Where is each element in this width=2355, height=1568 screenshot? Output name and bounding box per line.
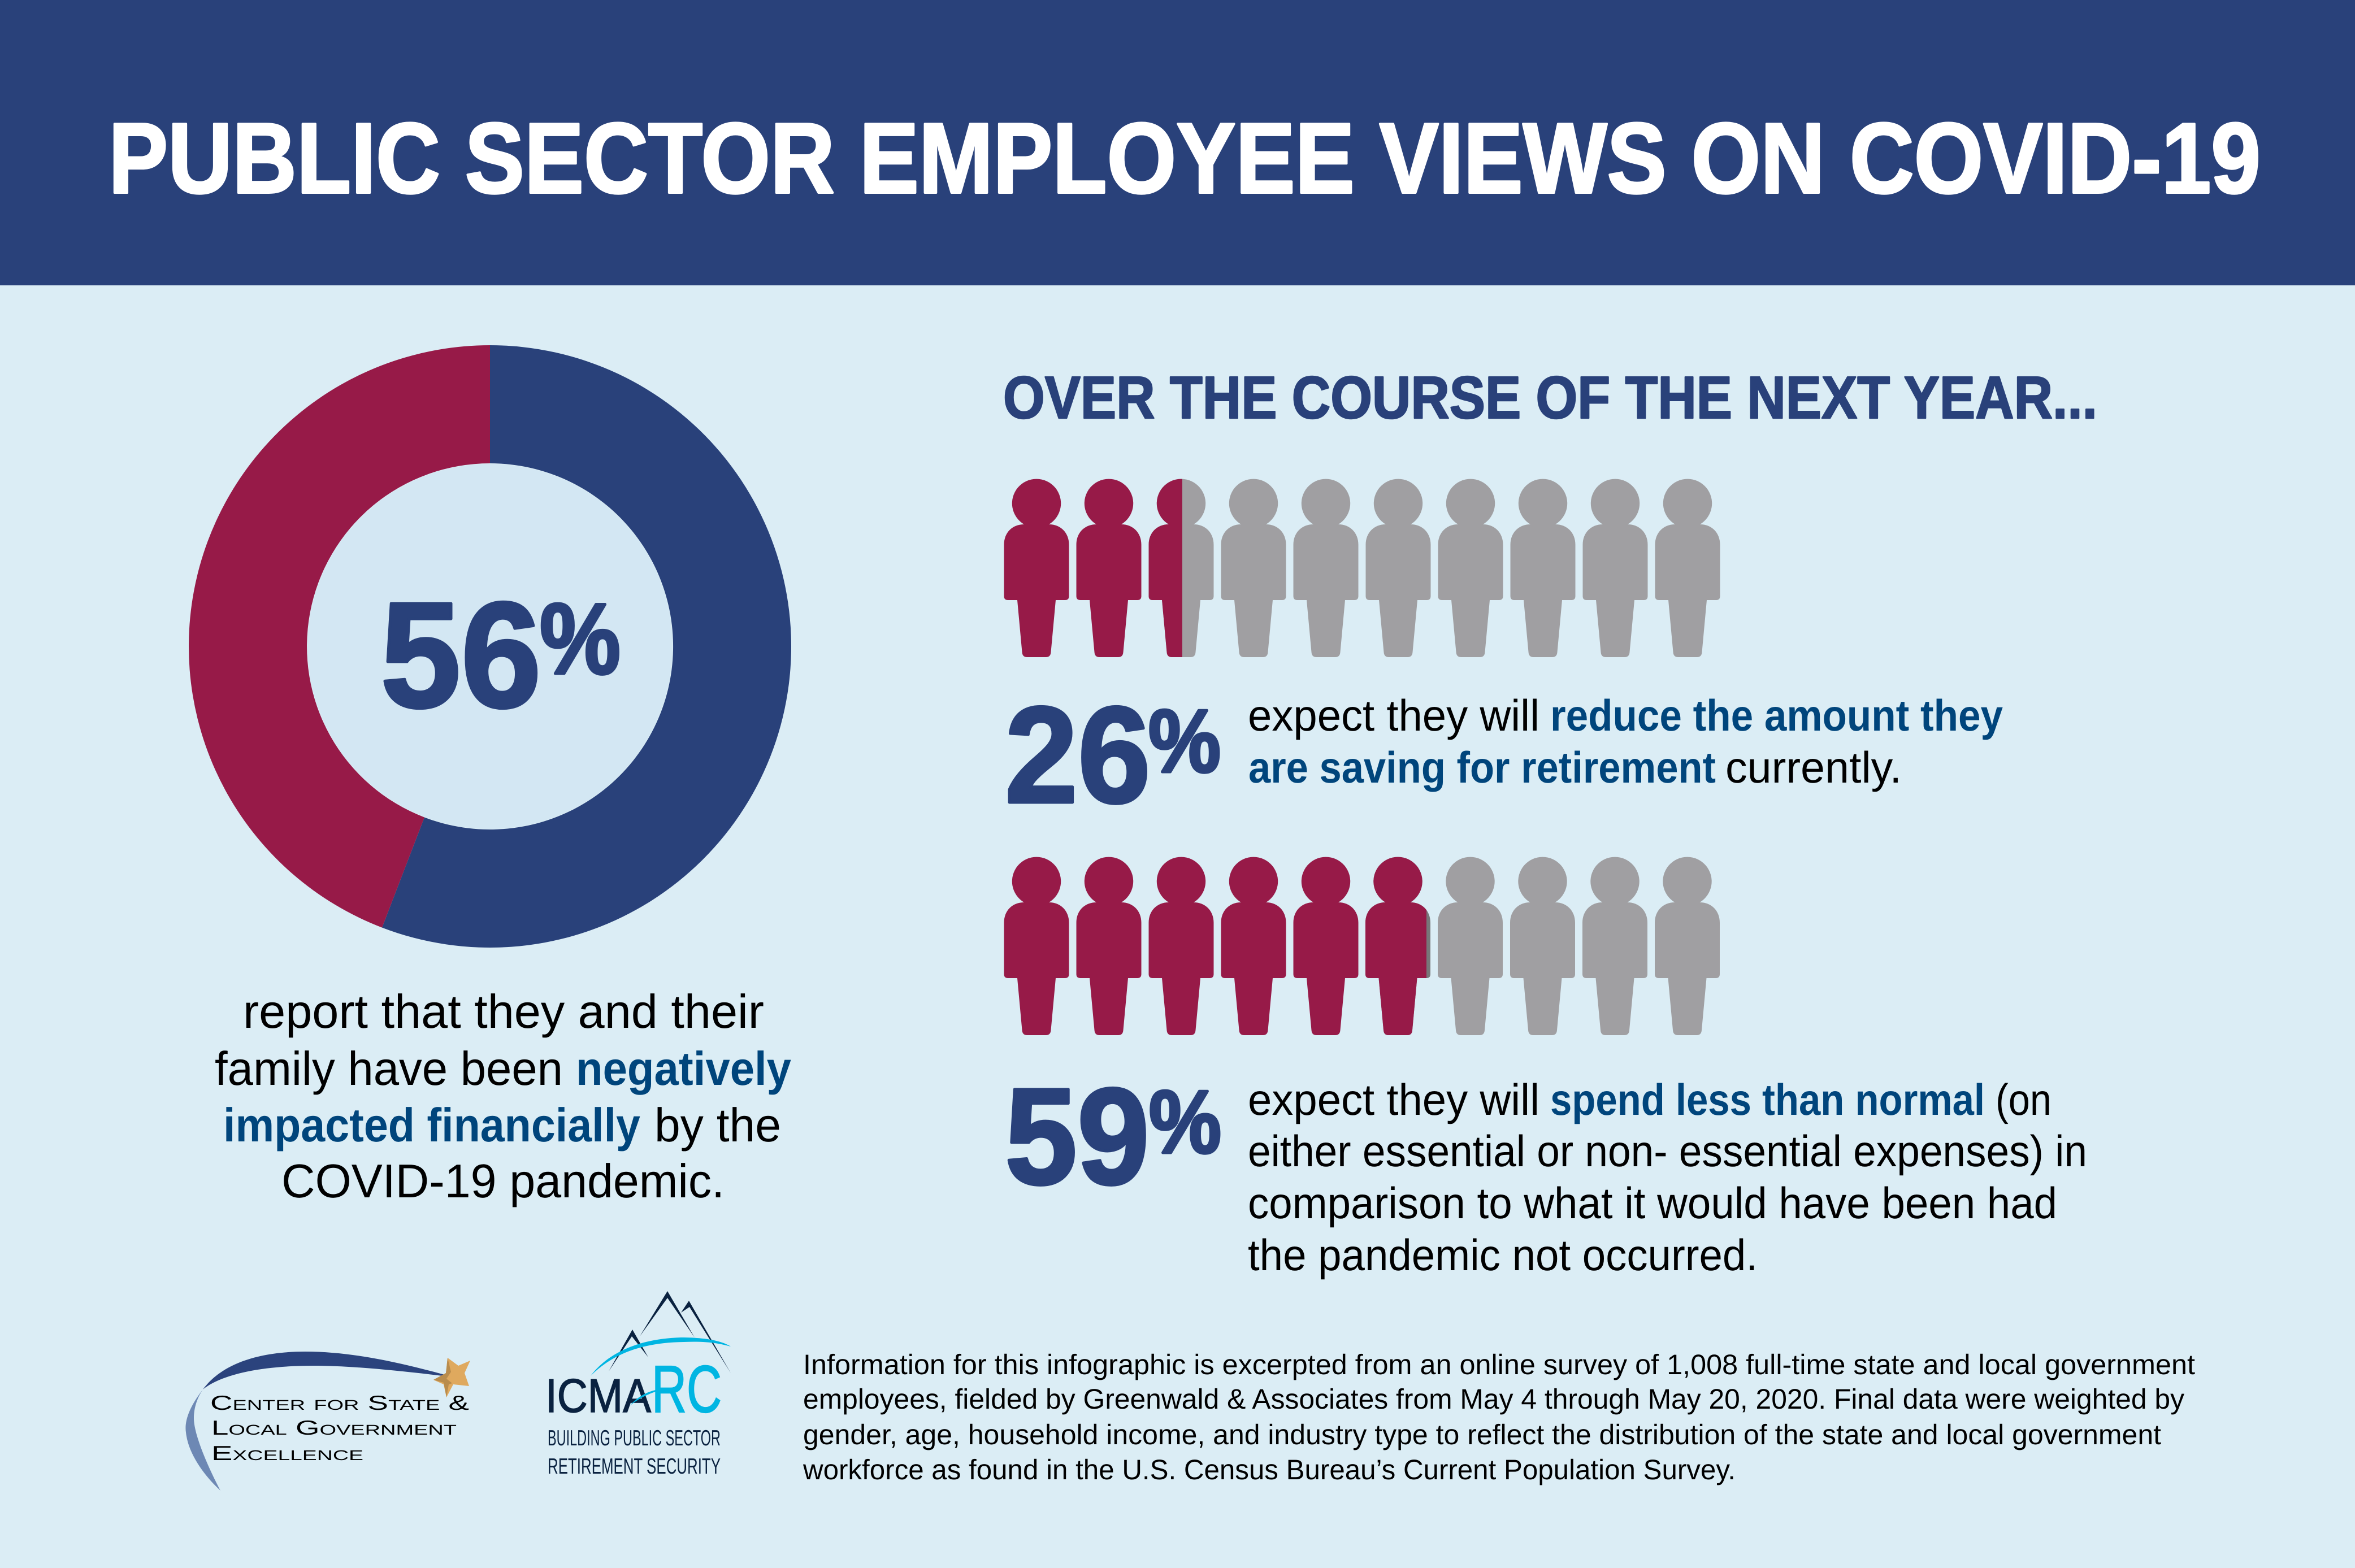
heading: over the course of the next year: OVER THE COURSE OF THE NEXT YEAR... [1003,364,2097,431]
text block: 59 percent description: (on [1996,1075,2052,1124]
text block: 26 percent description: expect they will [1248,690,1539,740]
pictogram row: 59 percent [1004,857,1720,1035]
wordmark ICMA: ICMA [545,1369,651,1422]
text block: source note: Information for this infographic is excerpted from an online survey of 1,008 full-time state and local government [803,1349,2195,1380]
logo text: Center for State & [210,1391,469,1414]
text block: source note [803,1349,2195,1486]
logo text: Local Government [211,1416,457,1439]
icon: arc [591,1337,731,1376]
donut segment: negatively impacted 56% [382,345,791,948]
icon: swoosh light [185,1389,220,1491]
text block: 26 percent description: are saving for retirement [1248,742,1716,792]
panel: donut chart 56% [189,345,791,948]
text block: donut description [215,985,791,1208]
text block: source note: employees, fielded by Greenwald & Associates from May 4 through May 20, 2020. Final data were weighted by [803,1383,2184,1415]
text block: donut description: impacted financially [223,1098,640,1152]
pictogram row: 26 percent [1004,479,1720,657]
donut value: 56 [380,571,541,739]
tagline [548,1426,721,1479]
text block: 26 percent description: currently. [1725,742,1902,792]
donut value [380,571,621,739]
stat: 26 percent: 26 [1005,679,1151,832]
logo: Center for State and Local Government Excellence [185,1352,470,1491]
text block: 59 percent description: comparison to what it would have been had [1248,1178,2057,1228]
tagline: BUILDING PUBLIC SECTOR [548,1426,721,1450]
text block: 59 percent description: spend less than normal [1550,1075,1985,1124]
text block: 26 percent description [1248,690,2003,792]
text block: donut description: COVID-19 pandemic. [281,1154,725,1208]
donut centre [307,464,673,829]
text block: 59 percent description: the pandemic not occurred. [1248,1230,1758,1280]
logo: ICMA-RC [545,1291,731,1479]
text block: 59 percent description: either essential or non- essential expenses) in [1248,1126,2087,1176]
stat: 59 percent: % [1149,1072,1221,1172]
donut segment: remainder 44% [189,345,490,928]
text block: donut description: family have been [215,1042,563,1095]
text block: donut description: report that they and their [243,985,764,1038]
text block: 59 percent description [1248,1075,2087,1280]
wordmark RC: RC [652,1352,722,1427]
text block: source note: workforce as found in the U.S. Census Bureau’s Current Population Survey. [803,1454,1736,1486]
text block: 26 percent description: reduce the amount they [1550,690,2003,740]
donut value: % [540,583,621,695]
text block: 59 percent description: expect they will [1248,1075,1539,1124]
stat: 26 percent: % [1148,692,1221,791]
logo text: Excellence [211,1441,363,1465]
text block: donut description: by the [654,1098,781,1152]
header banner [0,0,2355,285]
tagline: RETIREMENT SECURITY [548,1454,721,1479]
icon: small arc [630,1390,656,1406]
stat: 59 percent: 59 [1005,1060,1150,1213]
text block: donut description: negatively [576,1042,791,1095]
icon: star [433,1358,470,1397]
text block: source note: gender, age, household income, and industry type to reflect the distribution of the state and local government [803,1419,2161,1450]
icon: swoosh dark [203,1352,445,1389]
icon: mountains [609,1291,731,1373]
logo text [210,1391,469,1465]
